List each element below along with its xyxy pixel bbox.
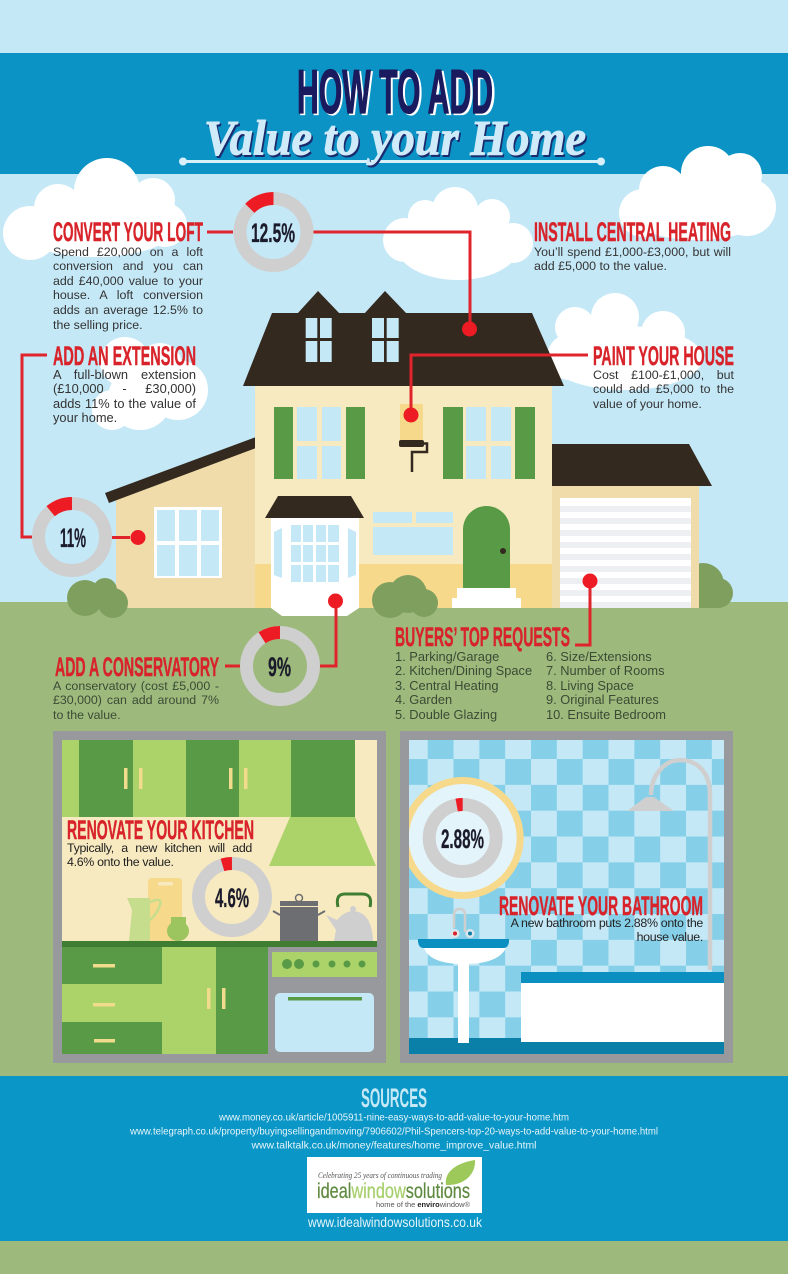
- title: HOW TO ADD: [298, 60, 496, 128]
- callout: buyers top requests: 2. Kitchen/Dining Space: [395, 663, 532, 678]
- callout: buyers top requests: 9. Original Features: [546, 692, 659, 707]
- logo: Celebrating 25 years of continuous trading: [318, 1171, 442, 1180]
- connector: paint: [405, 355, 588, 421]
- extractor hood: [269, 817, 376, 866]
- callout: install central heating: add £5,000 to the value.: [534, 259, 667, 273]
- source links: www.talktalk.co.uk/money/features/home_improve_value.html: [251, 1140, 537, 1152]
- callout: buyers top requests: 3. Central Heating: [395, 678, 499, 693]
- callout: add an extension: [53, 341, 196, 428]
- kitchen heading: RENOVATE YOUR KITCHEN: [67, 815, 254, 845]
- connector: buyers requests: [575, 575, 596, 645]
- callout: buyers top requests: [395, 622, 681, 726]
- callout: convert your loft: Spend £20,000 on a loft: [53, 245, 203, 259]
- right bush: [682, 563, 733, 608]
- callout: add an extension: adds 11% to the value of: [53, 396, 196, 411]
- callout: convert your loft: adds an average 12.5% to: [53, 303, 203, 317]
- callout: add an extension: ADD AN EXTENSION: [53, 341, 196, 371]
- callout: buyers top requests: 5. Double Glazing: [395, 707, 497, 722]
- donut: 4.6%: 4.6%: [215, 883, 249, 913]
- mirror with donut: 2.88%: 2.88%: [441, 824, 484, 854]
- title line one: [297, 58, 496, 128]
- footer band: [0, 1076, 788, 1241]
- callout: convert your loft: [53, 217, 203, 335]
- title: HOW TO ADD: [297, 58, 493, 127]
- floor: [409, 1038, 724, 1054]
- clouds: [3, 146, 776, 430]
- logo: [307, 1157, 482, 1213]
- jug: [127, 898, 160, 941]
- upper right window: [443, 407, 535, 479]
- callout: convert your loft: add £40,000 value to your: [53, 274, 203, 288]
- callout: convert your loft: the selling price.: [53, 318, 143, 332]
- callout: convert your loft: house. A loft conversion: [53, 288, 203, 302]
- callout: add a conservatory: [53, 652, 219, 725]
- logo: home of the envirowindow®: [376, 1200, 470, 1209]
- callout: add a conservatory: to the value.: [53, 708, 121, 722]
- bathroom text: A new bathroom puts 2.88% onto the: [511, 916, 703, 930]
- callout: add a conservatory: ADD A CONSERVATORY: [55, 652, 219, 682]
- callout: paint your house: [593, 341, 734, 414]
- mirror with donut: 2.88%: [402, 777, 524, 899]
- callout: buyers top requests: 10. Ensuite Bedroom: [546, 707, 666, 722]
- source links: [129, 1112, 658, 1152]
- connector: extension: [22, 355, 144, 544]
- connector: conservatory: [225, 595, 342, 666]
- donut: 12.5%: 12.5%: [251, 218, 295, 248]
- callout: buyers top requests: 7. Number of Rooms: [546, 663, 664, 678]
- source links: www.telegraph.co.uk/property/buyingsellingandmoving/7906602/Phil-Spencers-top-20-ways-to-add-value-to-your-home.html: [129, 1126, 658, 1138]
- title line two: Value to your Home: [206, 112, 588, 168]
- donut: 4.6%: [190, 855, 274, 939]
- callout: buyers top requests: 8. Living Space: [546, 678, 634, 693]
- callout: convert your loft: conversion and you can: [53, 259, 203, 273]
- header band: [0, 53, 788, 174]
- lower cabinets: [62, 947, 268, 1054]
- kitchen text: 4.6% onto the value.: [67, 855, 174, 869]
- house: [105, 291, 712, 616]
- source links: www.money.co.uk/article/1005911-nine-easy-ways-to-add-value-to-your-home.htm: [218, 1112, 569, 1124]
- side extension: [105, 437, 256, 608]
- main building: [255, 386, 552, 608]
- logo: idealwindowsolutions: [317, 1180, 470, 1203]
- donut: 11%: 11%: [60, 523, 86, 553]
- callout: add an extension: (£10,000 - £30,000): [53, 381, 196, 396]
- paint roller: [399, 404, 427, 472]
- callout: paint your house: value of your home.: [593, 397, 702, 411]
- sink: [418, 909, 509, 1043]
- connector: loft and central heating: [207, 232, 476, 335]
- callout: add an extension: your home.: [53, 410, 117, 425]
- callout: convert your loft: CONVERT YOUR LOFT: [53, 217, 203, 247]
- roof with dormers: [243, 291, 564, 386]
- kitchen text: Typically, a new kitchen will add: [67, 841, 252, 855]
- donut: 9%: 9%: [268, 652, 291, 682]
- kettle: [326, 894, 373, 941]
- donut: 12.5%: [226, 185, 321, 279]
- callout: add a conservatory: £30,000) can add around 7%: [53, 693, 219, 707]
- panel: bathroom: [400, 731, 733, 1063]
- bathtub: [521, 972, 724, 1042]
- title line two: Value to your Home: [204, 110, 586, 166]
- callout: paint your house: Cost £100-£1,000, but: [593, 368, 734, 382]
- front window: [373, 512, 453, 555]
- upper cabinets: [62, 740, 355, 817]
- callout: paint your house: could add £5,000 to the: [593, 382, 734, 396]
- pot: [273, 894, 325, 941]
- kitchen text: [67, 841, 252, 873]
- donut: 9%: [234, 620, 326, 712]
- bathroom text: [480, 916, 703, 948]
- footer band: SOURCES: [361, 1083, 427, 1113]
- callout: add a conservatory: A conservatory (cost £5,000 -: [53, 679, 219, 693]
- left bush: [67, 578, 128, 618]
- callout: install central heating: You’ll spend £1,000-£3,000, but will: [534, 245, 731, 259]
- oven: [268, 947, 377, 1054]
- panel: kitchen: [53, 731, 386, 1063]
- bay window: [265, 496, 364, 616]
- vase: [167, 917, 189, 941]
- title: [179, 58, 605, 168]
- donut: 11%: [25, 490, 119, 584]
- title underline: [179, 158, 605, 166]
- shower: [627, 760, 710, 970]
- front door: [452, 506, 521, 608]
- website: www.idealwindowsolutions.co.uk: [307, 1214, 483, 1230]
- bathroom text: house value.: [637, 930, 703, 944]
- counter top: [62, 941, 377, 948]
- ground: [0, 602, 788, 1274]
- middle bush: [372, 575, 438, 618]
- upper left window: [274, 407, 365, 479]
- callout: buyers top requests: BUYERS’ TOP REQUESTS: [395, 622, 570, 652]
- garage: [552, 444, 712, 608]
- callout: install central heating: [534, 217, 731, 277]
- callout: buyers top requests: 4. Garden: [395, 692, 452, 707]
- chopping board: [148, 878, 182, 941]
